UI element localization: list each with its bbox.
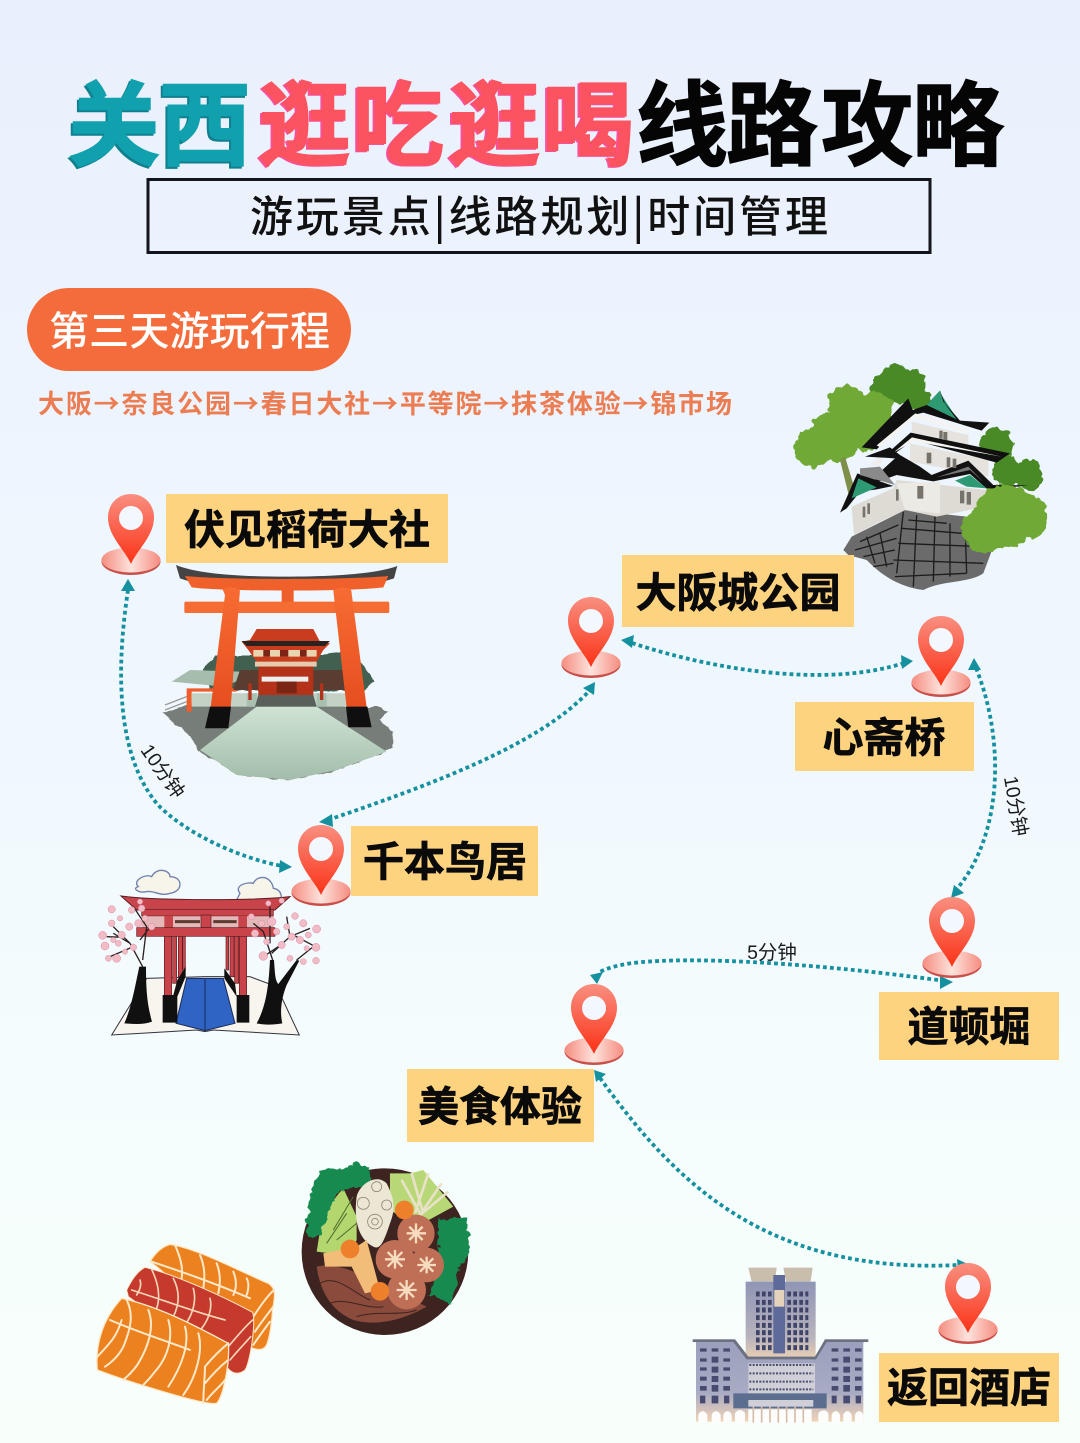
illustration: salmon sashimi and hot pot: [97, 1163, 470, 1404]
route: Senbon Torii to Osaka Castle: [319, 682, 595, 827]
label: 心斋桥: 心斋桥: [822, 715, 946, 761]
route: Osaka Castle to Shinsaibashi: [621, 635, 913, 675]
pin: food: [564, 984, 624, 1065]
pin: Fushimi Inari: [102, 494, 160, 575]
title: 逛吃逛喝: [259, 76, 634, 178]
route: Fushimi Inari to Senbon Torii: 10分钟: [136, 740, 189, 803]
label: 返回酒店: 返回酒店: [887, 1365, 1051, 1411]
illustration: hotel building: [693, 1268, 868, 1423]
label: 心斋桥: [795, 702, 974, 771]
stone base: [843, 510, 993, 590]
pin: Shinsaibashi: [912, 616, 970, 697]
route: Shinsaibashi to Dotonbori: 10分钟: [999, 774, 1031, 838]
pin: Osaka Castle: [562, 597, 620, 678]
label: 道顿堀: 道顿堀: [908, 1004, 1030, 1050]
title: 线路攻略: [636, 76, 1004, 178]
label: 美食体验: 美食体验: [418, 1084, 582, 1130]
label: 大阪城公园: 大阪城公园: [636, 570, 840, 616]
pin: Senbon Torii: [292, 825, 350, 906]
route: Dotonbori to food: 5分钟: [747, 942, 797, 964]
label: 道顿堀: [879, 992, 1059, 1060]
label: 美食体验: [407, 1069, 594, 1142]
label: 千本鸟居: 千本鸟居: [363, 839, 527, 885]
day pill heading: [27, 288, 351, 371]
hot pot: [302, 1163, 470, 1335]
label: 千本鸟居: [351, 826, 538, 896]
subtitle box: [148, 180, 930, 252]
route summary: 大阪→奈良公园→春日大社→平等院→抹茶体验→锦市场: [38, 384, 732, 421]
castle walls: [852, 480, 987, 535]
illustration: torii on open book: [99, 870, 321, 1035]
illustration: Fushimi Inari gate: [163, 565, 397, 780]
route: Dotonbori to food: [590, 942, 953, 989]
route: Shinsaibashi to Dotonbori: [951, 658, 1031, 898]
label: 伏见稻荷大社: [166, 494, 448, 563]
label: 返回酒店: [879, 1353, 1059, 1422]
title: [68, 76, 1004, 178]
pin: hotel: [938, 1263, 998, 1344]
route: food to hotel: [594, 1070, 970, 1272]
label: 伏见稻荷大社: 伏见稻荷大社: [184, 507, 430, 553]
illustration: Osaka castle: [794, 366, 1048, 590]
route: Fushimi Inari to Senbon Torii: [121, 579, 292, 873]
sashimi: [97, 1244, 275, 1404]
subtitle box: 游玩景点|线路规划|时间管理: [250, 183, 828, 245]
label: 大阪城公园: [622, 555, 854, 627]
pin: Dotonbori: [922, 897, 982, 978]
roofs: [927, 392, 958, 421]
title: 关西: [68, 76, 251, 178]
day pill heading: 第三天游玩行程: [49, 299, 330, 357]
